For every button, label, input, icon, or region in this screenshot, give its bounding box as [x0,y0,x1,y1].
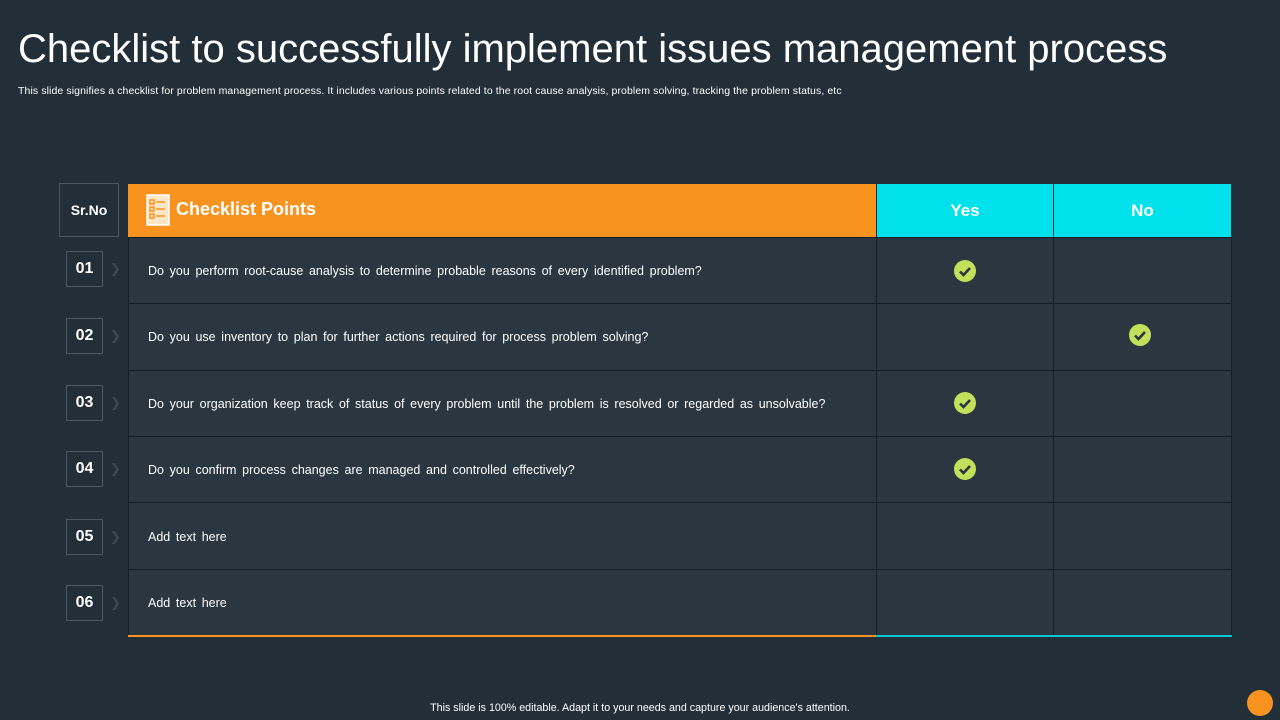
row 06 [66,585,227,621]
row 04: 04 [76,460,93,477]
header: checklist points [128,184,876,237]
sr no header [59,183,119,237]
row 05 [66,519,227,555]
row 01: Do you perform root-cause analysis to determine probable reasons of every identified problem? [148,264,702,278]
row 05: 05 [76,528,93,545]
sr no header: Sr.No [71,202,107,218]
row 02 [66,318,648,354]
row 05: ❯ [110,529,121,544]
row 06: ❯ [110,595,121,610]
row 02: Do you use inventory to plan for further actions required for process problem solving? [148,330,648,344]
check row4 yes [954,458,976,480]
header: no [1054,184,1231,237]
row 06: Add text here [148,596,227,610]
row 02: 02 [76,327,93,344]
icon: clipboard [146,194,170,226]
title: Checklist to successfully implement issues management process [18,27,1167,71]
row 02: ❯ [110,328,121,343]
row 03: Do your organization keep track of status of every problem until the problem is resolved or regarded as unsolvable? [148,397,825,411]
header: yes: Yes [950,201,980,220]
check row1 yes [954,260,976,282]
footer note: This slide is 100% editable. Adapt it to your needs and capture your audience's attention. [430,702,850,714]
row 03: ❯ [110,395,121,410]
row 04: ❯ [110,461,121,476]
header: yes [877,184,1053,237]
row 05: Add text here [148,530,227,544]
check row3 yes [954,392,976,414]
header: checklist points: Checklist Points [176,199,316,219]
row 04 [66,451,575,487]
row 03: 03 [76,394,93,411]
row 01 [66,251,702,287]
row 01: ❯ [110,261,121,276]
row 04: Do you confirm process changes are managed and controlled effectively? [148,463,575,477]
check row2 no [1129,324,1151,346]
orange dot [1247,690,1273,716]
header: no: No [1131,201,1154,220]
table [128,184,1232,637]
row 03 [66,385,825,421]
row 01: 01 [76,260,93,277]
subtitle: This slide signifies a checklist for problem management process. It includes various points related to the root cause analysis, problem solving, tracking the problem status, etc [18,85,842,97]
row 06: 06 [76,594,93,611]
